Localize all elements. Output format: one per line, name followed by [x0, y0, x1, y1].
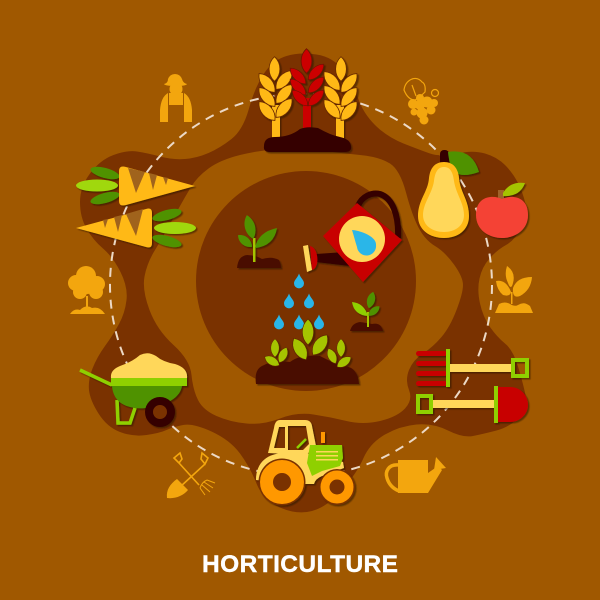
- icon: grapes: [404, 78, 438, 124]
- icon: spade and fork: [167, 453, 215, 498]
- plant: big bed: [256, 319, 359, 384]
- dashed ring: [110, 94, 492, 476]
- icon: wheelbarrow: [80, 353, 187, 423]
- icon: sprout: [495, 266, 533, 313]
- icon: carrot bottom: [76, 206, 196, 250]
- icon: tree: [68, 266, 105, 314]
- icon: watering can: [386, 457, 446, 493]
- icon: watering can red: [303, 194, 402, 282]
- plant: small right: [350, 291, 383, 331]
- inner dark circle: [196, 171, 416, 391]
- icon: apple: [476, 183, 528, 238]
- outer dark blob: [80, 54, 526, 512]
- icon: shovel: [418, 386, 528, 423]
- icon: tractor: [256, 420, 355, 506]
- icon: rake: [416, 349, 527, 387]
- title: HORTICULTURE: [202, 551, 398, 578]
- icon: carrot top: [76, 164, 195, 207]
- icon: wheat: [255, 49, 361, 152]
- inner light ring: [144, 149, 463, 424]
- icon: pear: [418, 150, 479, 238]
- plant: small left: [235, 214, 281, 268]
- water drops: [274, 274, 324, 329]
- icon: farmer: [160, 74, 192, 122]
